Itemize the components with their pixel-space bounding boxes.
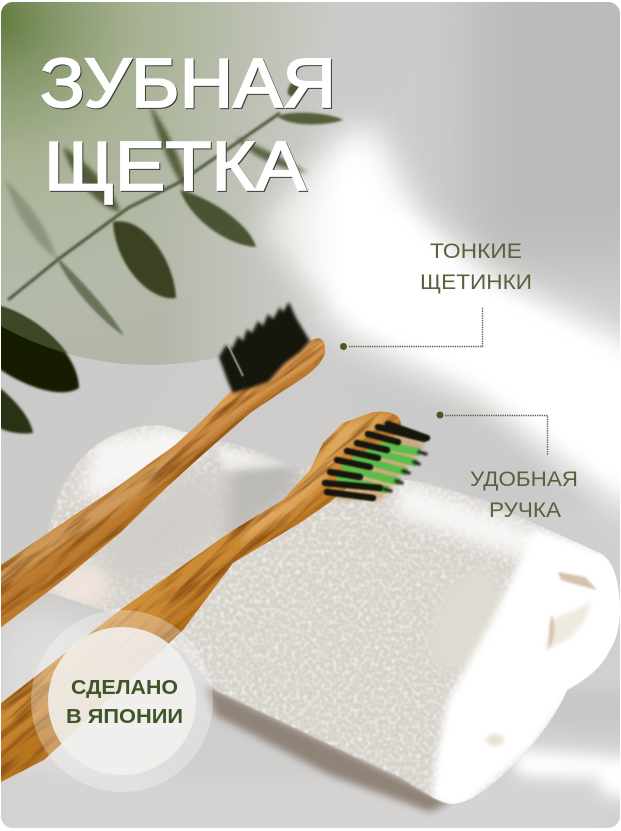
badge text	[66, 677, 183, 728]
bristle tips	[384, 452, 426, 491]
eucalyptus branch shadow	[0, 78, 343, 433]
label: comfortable handle	[470, 468, 578, 522]
towel	[46, 425, 621, 810]
leaf: faint left	[5, 180, 56, 258]
leaf: thin lower	[55, 255, 124, 336]
leaf: large centre	[113, 221, 176, 298]
handle and head	[1, 338, 326, 628]
label: thin bristles	[420, 240, 532, 294]
leaf: top small	[286, 79, 300, 98]
callout line: handle	[436, 412, 548, 455]
stem	[8, 113, 280, 300]
title: ЩЕТКА	[44, 127, 306, 205]
wood under bristles	[330, 425, 425, 500]
title: ЗУБНАЯ	[40, 44, 336, 122]
leaf: under title	[236, 137, 308, 173]
toothbrush 1	[1, 300, 326, 628]
handle and head	[1, 412, 401, 782]
black bristles	[325, 424, 427, 498]
label: thin bristles: ЩЕТИНКИ	[420, 271, 532, 294]
callout line: thin bristles	[340, 307, 482, 350]
badge text: СДЕЛАНО	[71, 677, 178, 699]
green gradient circle	[1, 2, 322, 365]
leaf: stem-top centre	[148, 109, 184, 190]
label: comfortable handle: РУЧКА	[489, 499, 561, 522]
leaf: upper left	[63, 147, 120, 212]
leaf: horizontal tip	[277, 113, 343, 124]
label: thin bristles: ТОНКИЕ	[430, 240, 522, 263]
label: comfortable handle: УДОБНАЯ	[470, 468, 578, 491]
leaf: large dark bottom left	[0, 305, 79, 392]
badge outer ring	[31, 610, 213, 792]
leaf: large dark, tinted part	[1, 305, 68, 354]
towel shadow on table	[205, 685, 450, 812]
badge text: В ЯПОНИИ	[66, 706, 183, 728]
towel shading	[50, 425, 621, 810]
badge inner circle	[48, 627, 196, 775]
green bristles	[337, 445, 420, 490]
leaf: right	[180, 190, 256, 247]
leaf: small dark bottom left	[0, 385, 33, 433]
towel roll end	[432, 530, 621, 810]
towel top highlight	[78, 426, 188, 504]
towel fold	[545, 600, 590, 650]
toothbrush 2	[1, 412, 432, 782]
bristles	[219, 302, 310, 393]
title	[40, 44, 336, 205]
